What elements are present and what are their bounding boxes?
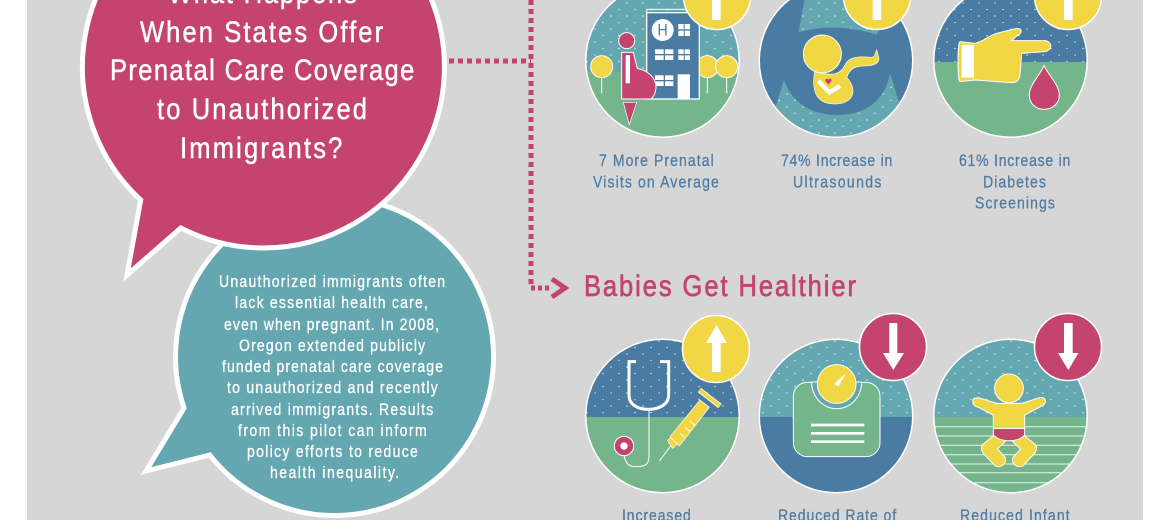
text block: background paragraph: arrived immigrants. Results: [231, 401, 434, 419]
heading: Babies Get Healthier: Babies Get Healthier: [584, 269, 856, 302]
title: [110, 0, 414, 164]
badge: up arrow, diabetes screenings: [1034, 0, 1102, 30]
text block: background paragraph: Oregon extended publicly: [239, 337, 425, 355]
title: Prenatal Care Coverage: [110, 53, 414, 86]
icon: pregnant woman and hospital: H: [657, 22, 668, 40]
label: prenatal visits: Visits on Average: [593, 173, 719, 192]
title: When States Offer: [140, 15, 383, 48]
label: prenatal visits: [593, 152, 719, 192]
connector: dotted line to Babies Get Healthier: [449, 0, 565, 297]
text block: background paragraph: to unauthorized and recently: [227, 379, 438, 397]
text block: background paragraph: from this pilot can inform: [238, 422, 427, 440]
label: diabetes screenings: 61% Increase in: [959, 152, 1070, 170]
text block: background paragraph: funded prenatal care coverage: [222, 358, 443, 376]
icon: fetus: [758, 0, 914, 138]
label: ultrasounds: 74% Increase in: [781, 152, 892, 170]
label: diabetes screenings: Diabetes: [983, 173, 1046, 192]
panel: teal speech bubble: [146, 198, 494, 516]
label: diabetes screenings: Screenings: [975, 195, 1055, 213]
badge: up arrow, prenatal visits: [684, 0, 750, 30]
text block: background paragraph: policy efforts to reduce: [247, 443, 418, 461]
text block: background paragraph: even when pregnant. In 2008,: [224, 316, 439, 334]
icon: baby: [933, 338, 1088, 494]
badge: up arrow, increased care: [682, 316, 750, 382]
icon: weight scale: [758, 338, 914, 494]
text block: background paragraph: [219, 273, 445, 482]
panel: pink speech bubble: [82, 0, 444, 275]
title: to Unauthorized: [157, 92, 367, 125]
badge: up arrow, ultrasounds: [844, 0, 910, 30]
badge: down arrow, infant: [1034, 314, 1102, 380]
title: Immigrants?: [180, 131, 342, 164]
label: ultrasounds: [781, 152, 892, 192]
text block: background paragraph: lack essential health care,: [235, 294, 428, 312]
icon: stethoscope and syringe: [585, 338, 740, 494]
label: ultrasounds: Ultrasounds: [793, 173, 882, 192]
text block: background paragraph: Unauthorized immigrants often: [219, 273, 445, 291]
badge: down arrow, reduced rate: [860, 314, 926, 380]
icon: hand and blood drop: [933, 0, 1088, 138]
text block: background paragraph: health inequality.: [270, 464, 399, 482]
label: prenatal visits: 7 More Prenatal: [599, 152, 714, 170]
label: diabetes screenings: [959, 152, 1070, 213]
icon: pregnant woman and hospital: [585, 0, 740, 138]
